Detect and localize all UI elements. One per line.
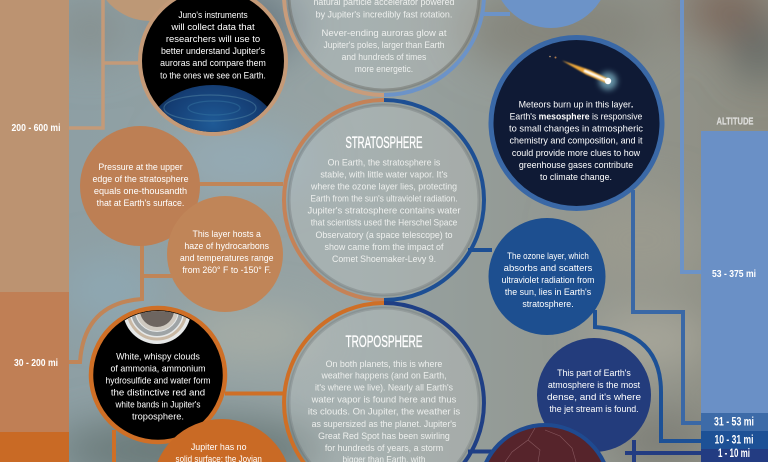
callout: stratosphere haze: from 260° F to -150° F. [182,265,271,276]
panel: stratosphere circle [284,100,484,300]
callout: ozone layer: ultraviolet radiation from [502,275,594,286]
icon: meteor [549,56,617,90]
panel: mesosphere meteor callout [491,38,662,208]
connectors: Earth side [468,0,701,462]
altitude bar: Earth [701,116,768,462]
panel: mesosphere meteor callout: to small changes in atmospheric [509,124,643,134]
callout: no solid surface [152,419,292,462]
panel: exosphere circle: and hundreds of times [342,52,427,63]
panel: troposphere circle: as supersized as the planet. Jupiter's [312,419,457,430]
panel: mesosphere meteor callout: could provide more clues to how [512,148,640,159]
panel: troposphere circle: Great Red Spot has been swirling [318,431,450,442]
label: 30-200 mi: 30 - 200 mi [14,357,58,369]
callout: stratosphere haze: and temperatures range [180,253,274,264]
image: lightning [505,428,576,462]
panel: troposphere circle: water vapor is found here and thus [311,394,457,406]
panel: Juno callout with aurora image: better understand Jupiter's [161,46,265,57]
callout: ozone layer: stratosphere. [522,299,574,310]
callout: stratosphere pressure: that at Earth's surface. [97,198,184,209]
panel: troposphere circle: for hundreds of years, a storm [325,443,443,454]
circle: tan top (cropped) [94,0,206,21]
panel: Juno callout with aurora image: to the ones we see on Earth. [160,70,266,82]
callout: ozone layer: The ozone layer, which [507,251,589,262]
panel: Juno callout with aurora image: Juno's instruments [178,10,248,21]
panel: lightning image circle [480,425,610,462]
panel: exosphere circle: by Jupiter's incredibly fast rotation. [316,10,452,20]
connectors: Jupiter side [69,0,284,462]
label: 10-31 mi: 10 - 31 mi [714,434,754,446]
callout: stratosphere haze [167,196,283,312]
panel: mesosphere meteor callout: Meteors burn up in this layer. [519,100,633,110]
heading: stratosphere: STRATOSPHERE [346,133,422,152]
callout: stratosphere haze: This layer hosts a [193,229,262,240]
heading: troposphere: TROPOSPHERE [346,332,422,351]
callout: ozone layer: the sun, lies in Earth's [505,287,591,298]
panel: stratosphere circle: stable, with little water vapor. It's [320,170,448,180]
panel: stratosphere circle: that scientists used the Herschel Space [311,218,457,228]
panel: troposphere clouds callout [88,306,228,444]
callout: ozone layer [488,218,606,335]
panel: Juno callout with aurora image: auroras and compare them [160,58,266,69]
panel: troposphere clouds callout: the distinctive red and [111,388,205,398]
panel: troposphere circle: On both planets, this is where [326,359,442,370]
callout: stratosphere pressure: Pressure at the upper [98,162,183,173]
panel: Juno callout with aurora image: will collect data that [170,22,255,33]
image: Jupiter aurora [159,85,267,132]
callout: jet stream: atmosphere is the most [548,380,640,391]
callout: stratosphere haze: haze of hydrocarbons [184,241,269,252]
panel: Juno callout with aurora image [138,0,288,136]
panel: troposphere clouds callout: White, whispy clouds [116,352,200,362]
callout: stratosphere pressure: edge of the stratosphere [92,174,188,185]
label: 1-10 mi: 1 - 10 mi [718,448,750,460]
panel: mesosphere meteor callout: Earth's mesosphere is responsive [510,112,642,122]
label: 200-600 mi: 200 - 600 mi [12,122,61,134]
panel: Juno callout with aurora image: researchers will use to [166,34,260,45]
panel: exosphere circle [284,0,484,95]
heading: altitude: ALTITUDE [716,116,754,128]
panel: stratosphere circle: Comet Shoemaker-Levy 9. [332,254,436,265]
callout: jet stream: the jet stream is found. [549,404,639,415]
callout: stratosphere pressure: equals one-thousandth [94,186,187,197]
panel: stratosphere circle: On Earth, the stratosphere is [328,158,441,168]
callout: jet stream [537,338,651,452]
panel: stratosphere circle: Jupiter's stratosphere contains water [308,206,460,216]
label: 31-53 mi: 31 - 53 mi [714,416,754,428]
panel: exosphere circle: Never-ending auroras glow at [322,28,447,39]
panel: troposphere circle: weather happens (and on Earth, [321,371,446,382]
altitude bar: Jupiter [0,0,69,462]
panel: stratosphere circle: show came from the impact of [324,242,444,253]
panel: troposphere circle: it's where we live). Nearly all Earth's [315,382,453,394]
panel: stratosphere circle: Observatory (a space telescope) to [316,230,452,241]
panel: troposphere clouds callout: of ammonia, ammonium [110,364,206,374]
callout: stratosphere pressure [80,126,200,246]
image: Jupiter cloud bands [124,311,190,344]
callout: jet stream: This part of Earth's [557,368,631,379]
panel: exosphere circle: more energetic. [355,64,413,75]
panel: mesosphere meteor callout: chemistry and composition, and it [510,136,643,146]
panel: mesosphere meteor callout: to climate change. [540,172,612,183]
circle: light blue top (cropped) [493,0,609,28]
callout: no solid surface: Jupiter has no [191,442,247,453]
callout: ozone layer: absorbs and scatters [504,263,593,274]
panel: troposphere circle [284,303,484,462]
panel: troposphere clouds callout: white bands in Jupiter's [115,400,201,410]
callout: jet stream: dense, and it's where [547,392,641,403]
panel: exosphere circle: Jupiter's poles, larger than Earth [324,40,444,51]
panel: troposphere clouds callout: troposphere. [132,412,184,422]
panel: stratosphere circle: where the ozone layer lies, protecting [310,182,457,192]
panel: stratosphere circle: Earth from the sun's ultraviolet radiation. [310,194,458,204]
label: 53-375 mi: 53 - 375 mi [712,268,756,280]
panel: mesosphere meteor callout: greenhouse gases contribute [519,160,633,171]
panel: troposphere circle: its clouds. On Jupiter, the weather is [308,406,460,418]
panel: troposphere clouds callout: hydrosulfide and water form [106,376,211,386]
